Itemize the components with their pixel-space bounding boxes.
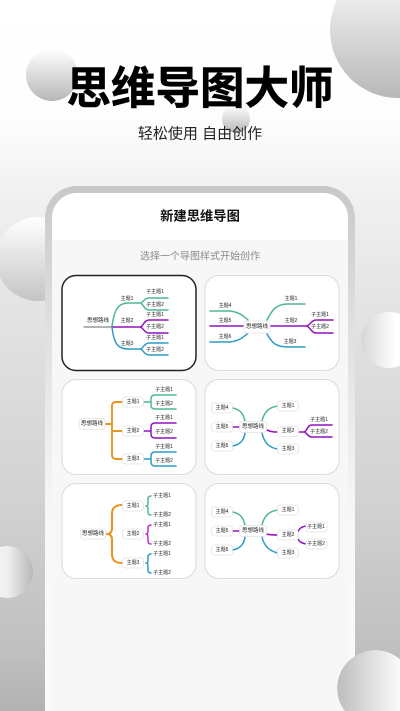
card 2: balanced lines: 主题1 bbox=[285, 295, 298, 302]
card 4: balanced boxes: 主题1 bbox=[282, 402, 295, 409]
title: 思维导图大师 bbox=[66, 64, 334, 114]
card 2: balanced lines: 主题2 bbox=[285, 317, 298, 324]
card 4: balanced boxes: 子主题1 bbox=[310, 416, 328, 423]
card 1: right tree selected: 主题3 bbox=[121, 340, 134, 347]
card 3: org tree: 子主题1 bbox=[155, 386, 173, 393]
card 3: org tree: 主题2 bbox=[127, 427, 140, 434]
card 5: brace tree: 子主题2 bbox=[153, 511, 171, 518]
card 5: brace tree: 子主题2 bbox=[153, 569, 171, 576]
card 6: balanced boxes with sub boxes: 主题4 bbox=[216, 508, 229, 515]
card 5: brace tree: 主题1 bbox=[127, 502, 140, 509]
card 3: org tree: 子主题2 bbox=[155, 457, 173, 464]
prompt text: 选择一个导图样式开始创作 bbox=[140, 250, 260, 262]
phone mockup bbox=[45, 186, 355, 711]
card 1: right tree selected: 子主题2 bbox=[146, 323, 164, 330]
card 6: balanced boxes with sub boxes: 子主题2 bbox=[307, 540, 325, 547]
card 4: balanced boxes: 主题4 bbox=[216, 404, 229, 411]
card 2: balanced lines: 思想路线 bbox=[246, 322, 268, 330]
card 3: org tree: 主题1 bbox=[127, 398, 140, 405]
card 2: balanced lines: 子主题2 bbox=[311, 323, 329, 330]
card 6: balanced boxes with sub boxes bbox=[205, 484, 339, 578]
card 4: balanced boxes: 思想路线 bbox=[242, 422, 264, 430]
card 6: balanced boxes with sub boxes: 主题5 bbox=[216, 527, 229, 534]
card 6: balanced boxes with sub boxes: 思想路线 bbox=[242, 526, 264, 534]
card 6: balanced boxes with sub boxes: 主题2 bbox=[282, 531, 295, 538]
card 2: balanced lines: 主题5 bbox=[219, 317, 232, 324]
card 4: balanced boxes: 主题2 bbox=[282, 427, 295, 434]
card 4: balanced boxes: 主题3 bbox=[282, 445, 295, 452]
card 5: brace tree: 子主题1 bbox=[153, 550, 171, 557]
card 3: org tree: 子主题2 bbox=[155, 428, 173, 435]
card 4: balanced boxes: 子主题2 bbox=[310, 428, 328, 435]
card 1: right tree selected bbox=[62, 276, 196, 370]
phone header: 新建思维导图 bbox=[160, 208, 240, 224]
card 5: brace tree: 子主题1 bbox=[153, 521, 171, 528]
card 2: balanced lines: 子主题1 bbox=[311, 311, 329, 318]
card 1: right tree selected: 主题2 bbox=[121, 317, 134, 324]
card 6: balanced boxes with sub boxes: 主题6 bbox=[216, 546, 229, 553]
card 6: balanced boxes with sub boxes: 子主题1 bbox=[307, 523, 325, 530]
card 3: org tree: 子主题1 bbox=[155, 414, 173, 421]
card 2: balanced lines: 主题6 bbox=[219, 333, 232, 340]
card 4: balanced boxes: 主题5 bbox=[216, 423, 229, 430]
card 6: balanced boxes with sub boxes: 主题1 bbox=[282, 506, 295, 513]
card 5: brace tree: 主题2 bbox=[127, 530, 140, 537]
card 3: org tree: 思想路线 bbox=[81, 419, 103, 427]
card 5: brace tree: 子主题1 bbox=[153, 492, 171, 499]
card 5: brace tree: 主题3 bbox=[127, 559, 140, 566]
phone header bbox=[52, 193, 348, 240]
card 2: balanced lines: 主题3 bbox=[284, 338, 297, 345]
card 6: balanced boxes with sub boxes: 主题3 bbox=[282, 549, 295, 556]
bottom right sphere bbox=[337, 650, 400, 711]
card 5: brace tree: 思想路线 bbox=[82, 529, 104, 537]
card 3: org tree: 子主题2 bbox=[155, 400, 173, 407]
card 1: right tree selected: 子主题1 bbox=[146, 311, 164, 318]
card 1: right tree selected: 子主题1 bbox=[146, 334, 164, 341]
card 3: org tree: 主题3 bbox=[127, 455, 140, 462]
card 4: balanced boxes: 主题6 bbox=[216, 442, 229, 449]
card 2: balanced lines: 主题4 bbox=[219, 302, 232, 309]
card 1: right tree selected: 主题1 bbox=[121, 295, 134, 302]
card 2: balanced lines bbox=[205, 276, 339, 370]
card 1: right tree selected: 子主题2 bbox=[146, 301, 164, 308]
card 1: right tree selected: 思想路线 bbox=[87, 316, 109, 324]
card 1: right tree selected: 子主题1 bbox=[146, 288, 164, 295]
card 5: brace tree bbox=[62, 484, 196, 578]
card 4: balanced boxes bbox=[205, 380, 339, 474]
card 5: brace tree: 子主题2 bbox=[153, 540, 171, 547]
card 3: org tree: 子主题1 bbox=[155, 443, 173, 450]
subtitle: 轻松使用 自由创作 bbox=[138, 126, 262, 142]
card 3: org tree bbox=[62, 380, 196, 474]
card 1: right tree selected: 子主题2 bbox=[146, 346, 164, 353]
